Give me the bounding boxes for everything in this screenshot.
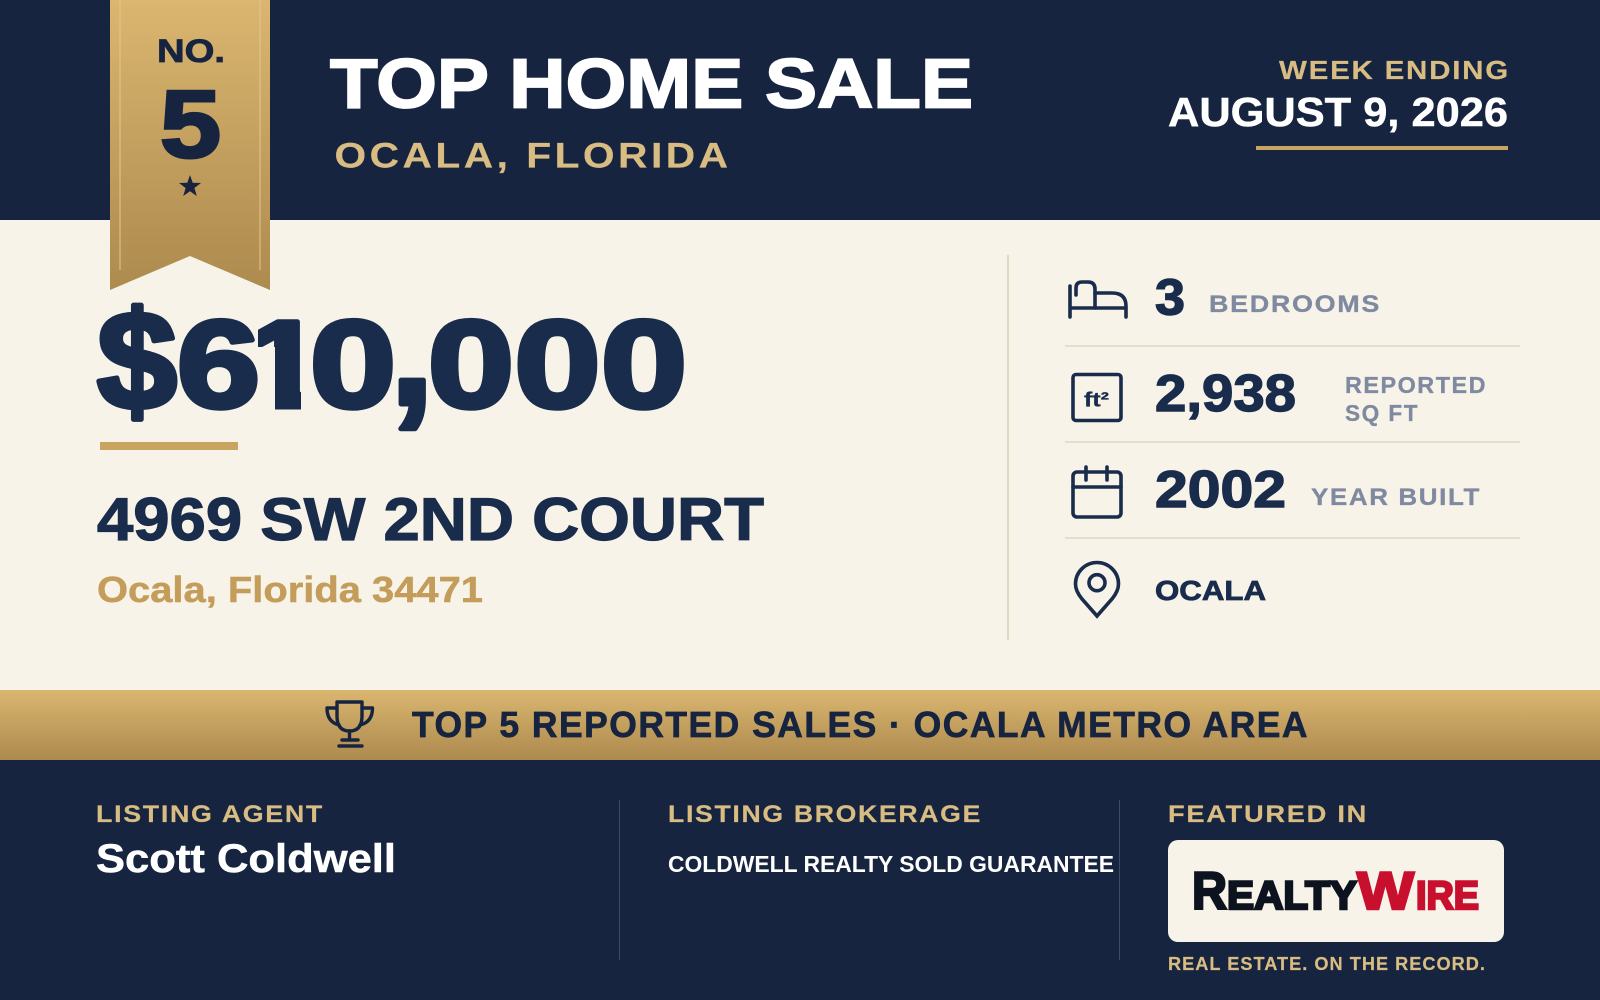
logo card: EALTY — [1227, 874, 1357, 918]
price: 6 — [177, 296, 260, 434]
listing brokerage label: LISTING BROKERAGE — [668, 801, 982, 828]
listing brokerage name: COLDWELL REALTY SOLD GUARANTEE — [668, 851, 1114, 877]
price: 0 — [428, 296, 514, 434]
square feet label: REPORTED — [1345, 372, 1487, 398]
price: 0 — [601, 296, 687, 434]
price: 0 — [310, 296, 396, 434]
banner — [0, 690, 1600, 760]
price: 0 — [514, 296, 600, 434]
banner text: TOP 5 REPORTED SALES · OCALA METRO AREA — [412, 704, 1309, 745]
logo tagline: REAL ESTATE. ON THE RECORD. — [1168, 954, 1486, 974]
week ending label: WEEK ENDING — [1279, 57, 1510, 85]
icon: bed — [1070, 282, 1126, 317]
listing agent label: LISTING AGENT — [96, 801, 324, 828]
price — [96, 302, 684, 432]
icon: location pin — [1076, 562, 1118, 616]
location value: OCALA — [1155, 575, 1266, 606]
bedrooms value: 3 — [1155, 268, 1185, 326]
logo card: IRE — [1416, 874, 1479, 918]
year built label: YEAR BUILT — [1311, 484, 1481, 511]
ribbon shape — [110, 0, 270, 290]
square feet label: SQ FT — [1345, 400, 1419, 426]
week ending date: AUGUST 9, 2026 — [1168, 89, 1508, 135]
icon: square feet — [1073, 374, 1121, 420]
icon: calendar — [1073, 467, 1121, 517]
panel: property facts — [1007, 255, 1520, 640]
ribbon number label: NO. — [157, 33, 225, 69]
icon: star — [179, 175, 201, 196]
logo card: W — [1357, 862, 1414, 921]
listing agent name: Scott Coldwell — [96, 837, 396, 881]
date underline — [1256, 146, 1508, 150]
square feet label — [1345, 372, 1487, 426]
icon: trophy — [327, 702, 372, 746]
price: $ — [97, 282, 177, 439]
price underline — [100, 442, 238, 450]
logo card — [1168, 840, 1504, 942]
square feet value: 2,938 — [1155, 365, 1296, 423]
city line: Ocala, Florida 34471 — [97, 569, 483, 610]
street address: 4969 SW 2ND COURT — [97, 486, 764, 553]
ribbon inner lines — [119, 0, 261, 270]
ribbon badge — [110, 0, 270, 290]
bedrooms label: BEDROOMS — [1209, 291, 1381, 318]
featured in label: FEATURED IN — [1168, 801, 1368, 828]
subtitle: OCALA, FLORIDA — [334, 136, 732, 176]
panel: header — [0, 0, 1600, 220]
logo card: R — [1192, 862, 1227, 921]
price: , — [390, 259, 434, 438]
title: TOP HOME SALE — [330, 44, 973, 122]
price: 1 — [243, 296, 324, 434]
icon: square feet: ft² — [1084, 390, 1109, 412]
panel: main cream background — [0, 220, 1600, 690]
year built value: 2002 — [1155, 461, 1286, 519]
panel: footer — [0, 760, 1600, 1000]
ribbon number: 5 — [160, 71, 221, 178]
